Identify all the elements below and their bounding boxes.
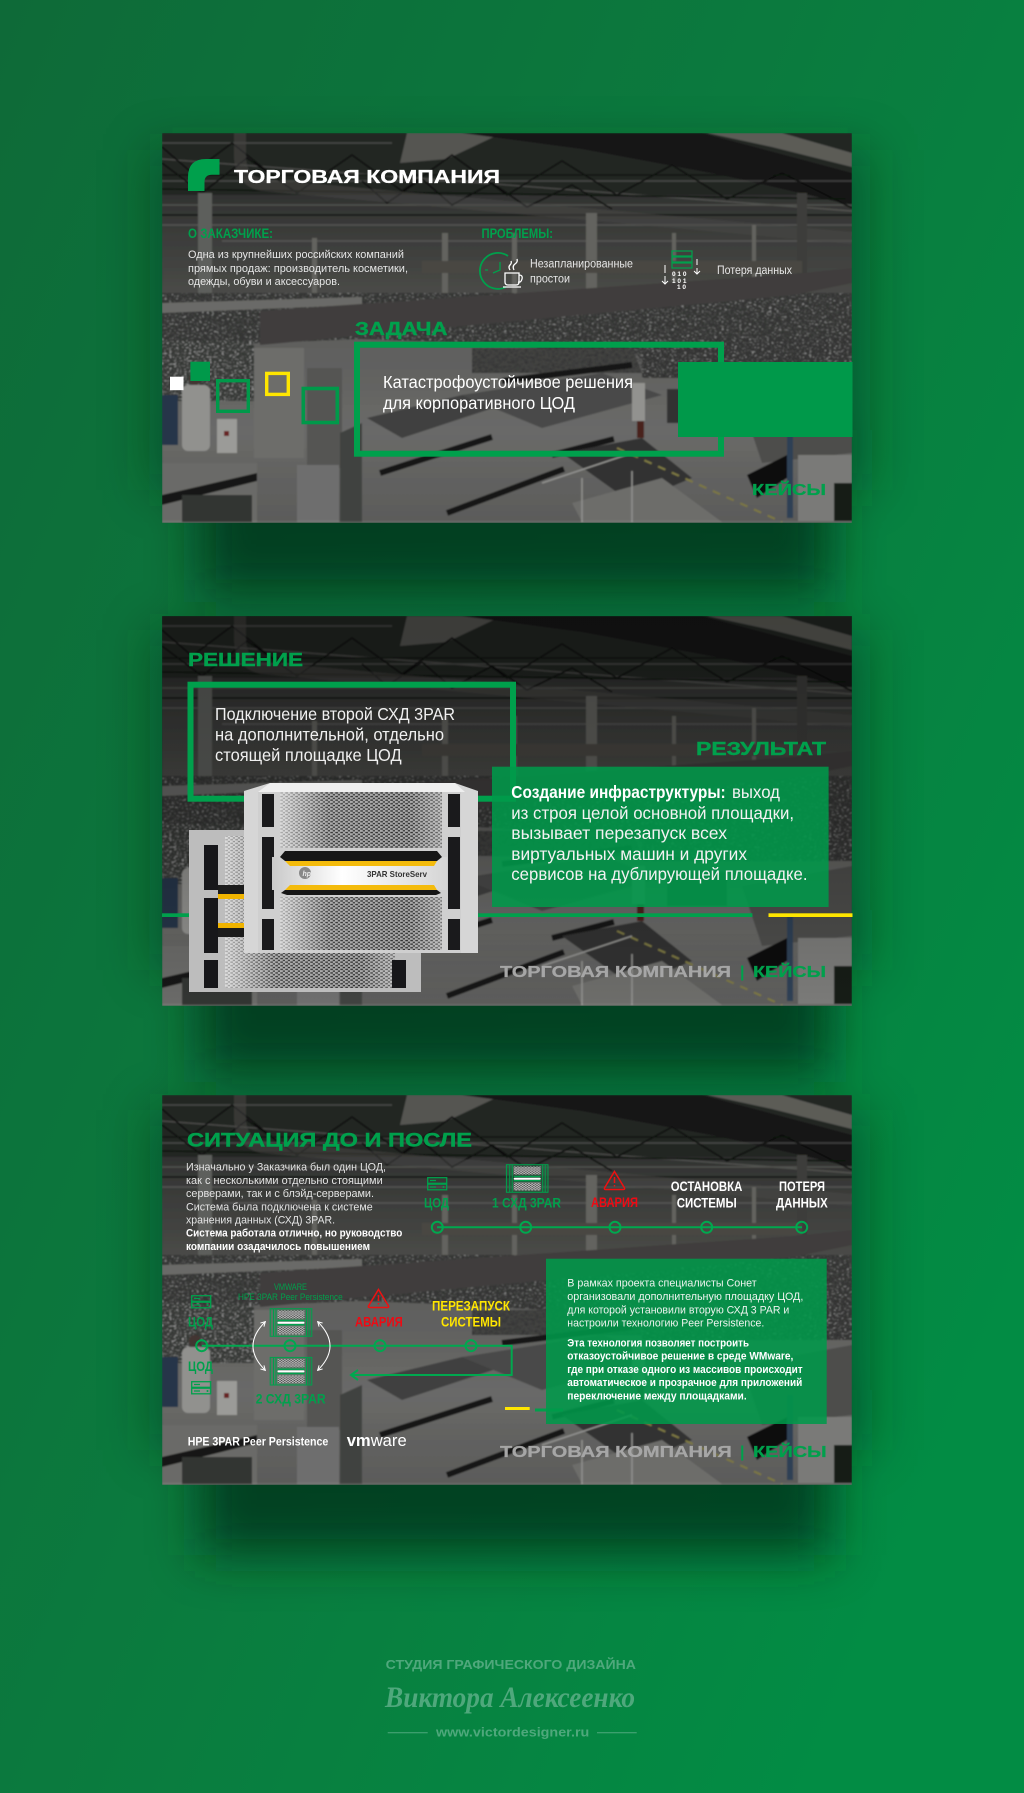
footer label: ТОРГОВАЯ КОМПАНИЯ [500,1444,732,1461]
panel drop shadows [150,150,870,1555]
solution description: автоматическое и прозрачное для приложений [567,1377,802,1389]
heading: solution: РЕШЕНИЕ [188,650,303,670]
icon: storage upper [270,1309,312,1336]
icon: storage lower [270,1357,312,1385]
company title: ТОРГОВАЯ КОМПАНИЯ [234,167,500,187]
solution description: Эта технология позволяет построить [567,1337,749,1349]
icon: storage one [506,1165,548,1192]
icon: upper data center [192,1296,211,1308]
result text: Создание инфраструктуры: [511,782,726,802]
panel: situation before and after [162,1095,852,1485]
footer label: | [740,1444,744,1461]
problem: unplanned downtime: Незапланированные [530,259,633,271]
icon: lower data center [192,1382,211,1394]
icon: data loss: 0 1 0 [672,271,687,278]
label: system stop [671,1179,742,1210]
bottom timeline with return arrow [196,1340,512,1380]
decorative squares [170,362,337,422]
problem: unplanned downtime [530,259,633,286]
footer label: КЕЙСЫ [752,480,826,499]
product name: HPE 3PAR Peer Persistence [188,1437,328,1449]
footer label: ТОРГОВАЯ КОМПАНИЯ [500,964,731,981]
label: system restart: СИСТЕМЫ [441,1315,501,1330]
icon: data center [428,1178,447,1190]
footer label [500,962,826,981]
accent dashes [505,1407,563,1412]
solution box [546,1259,827,1424]
panel: solution and result [162,616,852,1006]
replication arcs [253,1322,330,1370]
footer label: КЕЙСЫ [753,1442,827,1461]
task text [383,372,633,413]
heading: result: РЕЗУЛЬТАТ [696,739,826,759]
solution description: отказоустойчивое решение в среде WMware, [567,1351,793,1363]
solution description: настроили технологию Peer Persistence. [567,1317,764,1329]
label: upper data center: ЦОД [188,1315,213,1330]
solution text: на дополнительной, отдельно [215,725,444,745]
vmware logo: vmware [347,1431,407,1450]
heading: task: ЗАДАЧА [355,319,448,339]
footer label [500,1442,827,1461]
initial situation text [186,1162,402,1253]
result text: выход [732,782,780,802]
panel: customer and task [162,133,852,523]
green accent block [678,362,852,437]
label: system stop: ОСТАНОВКА [671,1179,742,1194]
footer label: | [740,964,744,981]
task text: для корпоративного ЦОД [383,393,575,413]
customer description: Одна из крупнейших российских компаний [188,249,404,261]
heading: about customer: О ЗАКАЗЧИКЕ: [188,226,273,241]
solution description: переключение между площадками. [567,1390,747,1402]
initial situation text: хранения данных (СХД) 3PAR. [186,1214,335,1226]
solution text: стоящей площадке ЦОД [215,745,402,765]
divider lines [162,913,852,917]
heading: before and after: СИТУАЦИЯ ДО И ПОСЛЕ [187,1131,472,1152]
label: vmware peer persistence [238,1282,343,1303]
initial situation text: Система была подключена к системе [186,1201,373,1213]
solution description: В рамках проекта специалисты Сонет [567,1278,757,1290]
icon: data loss: 1 0 1 [672,278,687,285]
factory photo background [162,133,852,523]
label: data loss: ПОТЕРЯ [779,1179,825,1194]
front storage array [244,783,478,953]
designer signature: Виктора Алексеенко [384,1681,635,1714]
initial situation text: серверами, так и с блэйд-серверами. [186,1188,374,1200]
result text: сервисов на дублирующей площадке. [511,864,808,884]
result text: виртуальных машин и других [511,844,747,864]
top timeline [432,1222,807,1233]
result box [492,767,829,907]
task frame [357,345,721,454]
label: accident lower: АВАРИЯ [355,1315,403,1330]
initial situation text: Система работала отлично, но руководство [186,1228,402,1240]
label: lower data center: ЦОД [188,1359,213,1374]
result text: из строя целой основной площадки, [511,803,794,823]
icon: data loss: 1 0 [677,284,686,291]
footer label: КЕЙСЫ [753,962,826,981]
factory photo background [162,1095,852,1485]
label: one storage: 1 СХД 3PAR [492,1195,561,1210]
task text: Катастрофоустойчивое решения [383,372,633,392]
label: system restart [432,1298,511,1330]
initial situation text: как с несколькими отдельно стоящими [186,1175,383,1187]
website: www.victordesigner.ru [435,1725,589,1740]
label: two storages: 2 СХД 3PAR [256,1391,326,1406]
solution text [215,704,455,765]
initial situation text: Изначально у Заказчика был один ЦОД, [186,1162,386,1174]
label: data loss [776,1179,828,1210]
icon: data loss [662,251,700,291]
label: system stop: СИСТЕМЫ [677,1195,737,1210]
solution description: для которой установили вторую СХД 3 PAR и [567,1304,789,1316]
icon: clock with coffee [480,253,522,289]
result text [511,782,808,884]
initial situation text: компании озадачилось повышением [186,1241,370,1253]
rear storage array [189,830,421,992]
factory photo background [162,616,852,1006]
problem: data loss: Потеря данных [717,265,792,277]
customer description: одежды, обуви и аксессуаров. [188,276,340,288]
front storage array: 3PAR StoreServ [367,869,427,879]
solution frame [190,685,513,799]
solution description [567,1278,803,1402]
customer description [188,249,408,288]
label: accident: АВАРИЯ [591,1195,638,1210]
solution description: где при отказе одного из массивов происходит [567,1364,803,1376]
icon: warning lower [368,1290,389,1308]
label: data center: ЦОД [424,1196,449,1211]
problem: unplanned downtime: простои [530,274,570,286]
studio name: СТУДИЯ ГРАФИЧЕСКОГО ДИЗАЙНА [386,1657,637,1672]
label: vmware peer persistence: HPE 3PAR Peer Persistence [238,1292,343,1303]
icon: warning [604,1172,625,1190]
front storage array: hp [302,871,312,878]
customer description: прямых продаж: производитель косметики, [188,263,408,275]
photo dark overlay [162,616,852,1003]
solution description: организовали дополнительную площадку ЦОД, [567,1291,803,1303]
heading: problems: ПРОБЛЕМЫ: [482,226,553,241]
label: system restart: ПЕРЕЗАПУСК [432,1298,511,1313]
result text: вызывает перезапуск всех [511,823,727,843]
label: data loss: ДАННЫХ [776,1195,828,1210]
studio watermark [384,1657,637,1740]
solution text: Подключение второй СХД 3PAR [215,704,455,724]
label: vmware peer persistence: VMWARE [274,1282,307,1293]
logo mark [188,159,220,191]
